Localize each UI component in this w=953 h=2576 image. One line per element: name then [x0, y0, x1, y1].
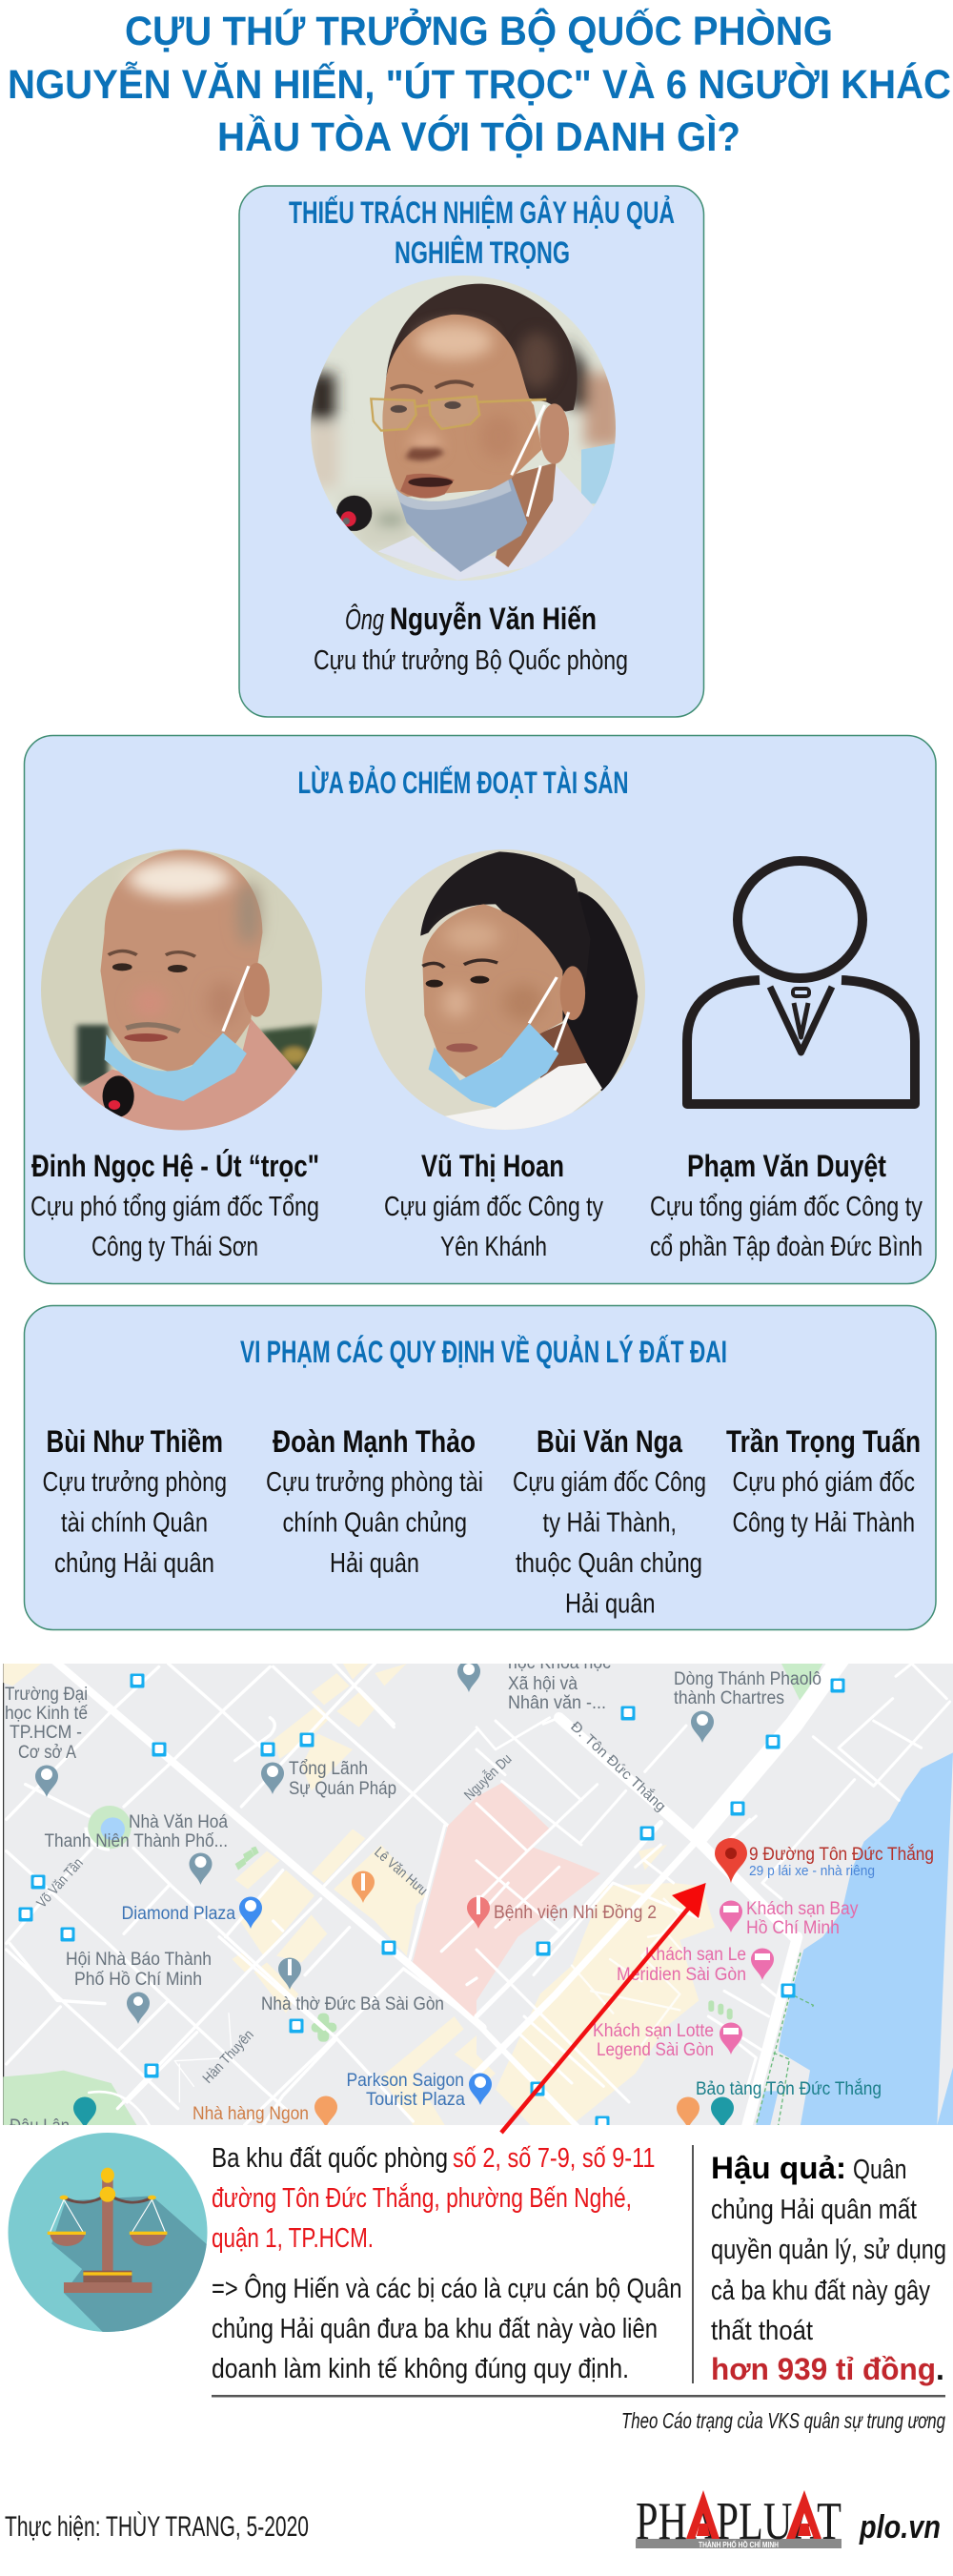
heading: thiếu trách nhiệm: THIẾU TRÁCH NHIỆM GÂY HẬU QUẢ: [289, 195, 675, 230]
title: [8, 8, 951, 160]
title: CỰU THỨ TRƯỞNG BỘ QUỐC PHÒNG: [125, 8, 833, 54]
person: Bùi Như Thiềm: tài chính Quân: [61, 1508, 208, 1539]
heading: lừa đảo: LỪA ĐẢO CHIẾM ĐOẠT TÀI SẢN: [297, 766, 629, 800]
map labels: Khách sạn Lotte: [593, 2021, 714, 2041]
text block: consequence: hơn 939 tỉ đồng: [711, 2352, 936, 2386]
text block: consequence: Quân: [853, 2155, 907, 2185]
photo: Nguyễn Văn Hiến: [305, 272, 622, 589]
heading: thiếu trách nhiệm: NGHIÊM TRỌNG: [395, 235, 570, 270]
text block: consequence: .: [936, 2352, 944, 2386]
person: Bùi Như Thiềm: [42, 1424, 227, 1579]
map labels: Parkson Saigon: [347, 2071, 464, 2091]
map labels: Xã hội và: [508, 1674, 578, 1694]
text block: land plots: chủng Hải quân đưa ba khu đất này vào liên: [212, 2314, 658, 2344]
person: Đoàn Mạnh Thảo: Hải quân: [330, 1548, 419, 1579]
logo: Pháp Luật: plo.vn: [859, 2509, 941, 2545]
map labels: Trường Đại: [5, 1685, 88, 1705]
text block: consequence: Hậu quả:: [711, 2151, 846, 2185]
text block: land plots: số 2, số 7-9, số 9-11: [453, 2143, 656, 2174]
person: Đinh Ngọc Hệ: Cựu phó tổng giám đốc Tổng: [30, 1192, 319, 1222]
map labels: học Kinh tế: [5, 1704, 88, 1724]
map labels: Legend Sài Gòn: [597, 2040, 714, 2060]
text block: land plots: Ba khu đất quốc phòng: [212, 2143, 448, 2174]
name: Nguyễn Văn Hiến: Nguyễn Văn Hiến: [390, 602, 597, 636]
person: Đoàn Mạnh Thảo: Cựu trưởng phòng tài: [266, 1467, 483, 1498]
map labels: học Khoa học: [508, 1653, 611, 1673]
map labels: Nguyễn Du: [461, 1751, 515, 1804]
text block: land plots: [212, 2143, 682, 2384]
panel: vi phạm quy định quản lý đất đai: [25, 1306, 936, 1630]
icon: scales of justice: [8, 2133, 210, 2339]
map labels: [5, 1653, 934, 2136]
person: Bùi Như Thiềm: Bùi Như Thiềm: [46, 1424, 223, 1459]
map labels: Võ Văn Tần: [33, 1855, 87, 1912]
map labels: Thanh Niên Thành Phố...: [44, 1831, 228, 1851]
person: Đoàn Mạnh Thảo: [266, 1424, 483, 1579]
panel: thiếu trách nhiệm: [239, 186, 703, 717]
person: Bùi Văn Nga: Bùi Văn Nga: [537, 1424, 682, 1459]
map labels: 9 Đường Tôn Đức Thắng: [749, 1844, 934, 1865]
person: Trần Trọng Tuấn: [726, 1424, 921, 1539]
map labels: Nhà hàng Ngon: [193, 2104, 309, 2124]
person: Vũ Thị Hoan: Vũ Thị Hoan: [421, 1149, 564, 1183]
credit: Thực hiện: THÙY TRANG, 5-2020: [5, 2511, 309, 2543]
map labels: Tourist Plaza: [366, 2090, 465, 2110]
person: Vũ Thị Hoan: Yên Khánh: [440, 1232, 547, 1262]
person: Bùi Văn Nga: Hải quân: [565, 1588, 656, 1619]
person: Bùi Văn Nga: [513, 1424, 706, 1619]
text block: land plots: đường Tôn Đức Thắng, phường Bến Nghé,: [212, 2182, 632, 2214]
map labels: Đ. Tôn Đức Thắng: [567, 1718, 669, 1815]
heading: thiếu trách nhiệm: [289, 195, 675, 270]
icon: location pin: [715, 1838, 747, 1883]
person: Phạm Văn Duyệt: Phạm Văn Duyệt: [687, 1149, 886, 1183]
text block: consequence: chủng Hải quân mất: [711, 2195, 917, 2225]
text block: land plots: quận 1, TP.HCM.: [212, 2223, 374, 2254]
person: Bùi Như Thiềm: Cựu trưởng phòng: [42, 1467, 227, 1498]
map labels: Khách sạn Le: [645, 1945, 746, 1965]
person: Trần Trọng Tuấn: Cựu phó giám đốc: [732, 1467, 915, 1498]
map labels: Bệnh viện Nhi Đồng 2: [494, 1903, 657, 1923]
map labels: Meridien Sài Gòn: [617, 1965, 746, 1985]
person: Vũ Thị Hoan: [384, 1149, 603, 1262]
person: Đinh Ngọc Hệ: Công ty Thái Sơn: [91, 1232, 258, 1262]
map labels: Nhà Văn Hoá: [129, 1812, 228, 1832]
name: Nguyễn Văn Hiến: Ông: [345, 603, 384, 636]
heading: vi phạm: VI PHẠM CÁC QUY ĐỊNH VỀ QUẢN LÝ ĐẤT ĐAI: [240, 1335, 727, 1369]
person: Đoàn Mạnh Thảo: Đoàn Mạnh Thảo: [273, 1424, 476, 1459]
logo: Pháp Luật: THÀNH PHỐ HỒ CHÍ MINH: [699, 2540, 779, 2549]
map labels: Hàn Thuyên: [199, 2027, 257, 2087]
name: Nguyễn Văn Hiến: Cựu thứ trưởng Bộ Quốc phòng: [314, 645, 628, 676]
icon: person silhouette: [687, 861, 915, 1104]
title: HẦU TÒA VỚI TỘI DANH GÌ?: [217, 113, 740, 160]
map labels: Khách sạn Bay: [746, 1899, 859, 1919]
map labels: Lê Văn Hưu: [371, 1844, 431, 1899]
map labels: Đậu Lân: [10, 2116, 70, 2136]
person: Bùi Văn Nga: Cựu giám đốc Công: [513, 1467, 706, 1498]
map labels: Dòng Thánh Phaolô: [674, 1669, 821, 1689]
map labels: TP.HCM -: [10, 1723, 82, 1743]
person: Bùi Văn Nga: thuộc Quân chủng: [516, 1548, 702, 1579]
person: Bùi Văn Nga: ty Hải Thành,: [543, 1508, 677, 1539]
person: Đinh Ngọc Hệ: Đinh Ngọc Hệ - Út “trọc": [31, 1149, 319, 1183]
text block: consequence: thất thoát: [711, 2316, 813, 2346]
person: Phạm Văn Duyệt: [650, 1149, 923, 1262]
map icons: [19, 1661, 844, 2130]
map labels: Hội Nhà Báo Thành: [66, 1950, 212, 1970]
person: Bùi Như Thiềm: chủng Hải quân: [54, 1548, 214, 1579]
map labels: thành Chartres: [674, 1688, 784, 1708]
map: [3, 1653, 953, 2136]
map labels: Nhân văn -...: [508, 1693, 606, 1713]
panel: lừa đảo chiếm đoạt tài sản: [25, 736, 936, 1283]
person: Đinh Ngọc Hệ: [30, 1149, 319, 1262]
map labels: Diamond Plaza: [122, 1904, 235, 1924]
map labels: Tổng Lãnh: [289, 1759, 368, 1779]
name: Nguyễn Văn Hiến: [314, 602, 628, 676]
photo: Vũ Thị Hoan: [365, 849, 645, 1130]
map labels: Phố Hồ Chí Minh: [74, 1970, 202, 1990]
person: Vũ Thị Hoan: Cựu giám đốc Công ty: [384, 1192, 603, 1222]
map labels: Sự Quán Pháp: [289, 1779, 396, 1799]
person: Đoàn Mạnh Thảo: chính Quân chủng: [282, 1508, 467, 1539]
photo: Đinh Ngọc Hệ: [41, 848, 322, 1131]
map labels: Bảo tàng Tôn Đức Thắng: [696, 2078, 882, 2099]
arrow: [501, 1883, 706, 2133]
map labels: 29 p lái xe - nhà riêng: [749, 1863, 875, 1879]
map labels: Cơ sở A: [18, 1743, 76, 1763]
text block: consequence: [711, 2151, 946, 2386]
map labels: Hồ Chí Minh: [746, 1918, 840, 1938]
logo: Pháp Luật: PHAPLUAT: [636, 2492, 841, 2551]
text block: land plots: doanh làm kinh tế không đúng quy định.: [212, 2354, 629, 2384]
text block: land plots: => Ông Hiến và các bị cáo là cựu cán bộ Quân: [212, 2272, 682, 2304]
map labels: Nhà thờ Đức Bà Sài Gòn: [261, 1994, 444, 2014]
